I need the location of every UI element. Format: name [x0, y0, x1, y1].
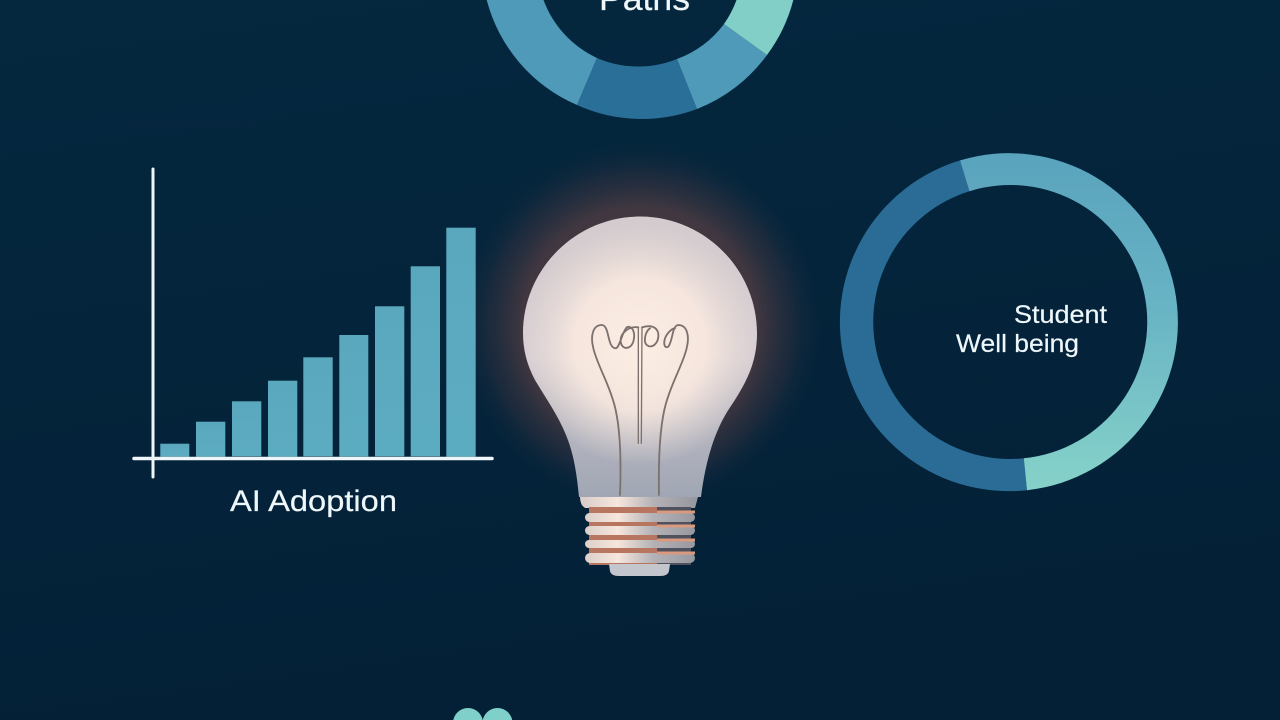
- ring label: [956, 301, 1107, 358]
- bar chart: AI adoption: [134, 169, 492, 518]
- segment: right teal: [724, 0, 793, 55]
- ring label: Well being: [956, 330, 1079, 358]
- bars: [160, 228, 476, 457]
- bulb glow: [458, 143, 822, 507]
- donut chart: paths: [487, 0, 793, 119]
- segment: bottom dark blue: [577, 58, 697, 119]
- icon: heart (cropped at bottom): [453, 708, 512, 720]
- bulb tip: [609, 564, 670, 576]
- segment: right blue: [677, 24, 767, 109]
- ring segment: light gradient: [960, 153, 1178, 490]
- bulb collar: [580, 497, 698, 508]
- bulb glass: [523, 216, 757, 497]
- ring chart: student well-being: [840, 153, 1178, 491]
- bulb inner light: [523, 216, 757, 497]
- segment: left blue: [487, 0, 597, 105]
- ring segment: dark blue: [840, 160, 1027, 491]
- light bulb: [523, 216, 757, 576]
- screw base: [585, 507, 695, 565]
- axes: [134, 169, 492, 477]
- chart label: AI Adoption: [230, 485, 397, 518]
- filament: [592, 325, 688, 495]
- ring label: Student: [1014, 301, 1107, 329]
